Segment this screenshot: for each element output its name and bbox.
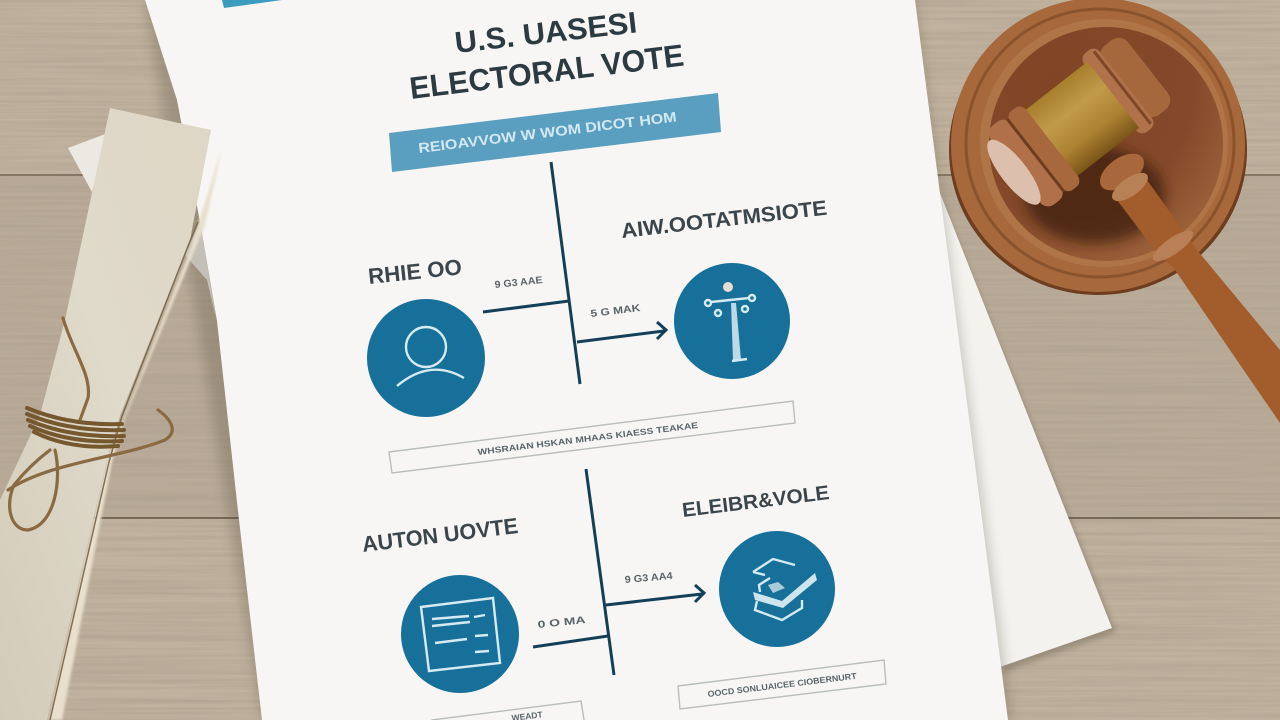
blue banner: [389, 93, 721, 172]
flow diagram: top: 9 G3 AAE: [494, 275, 543, 291]
paper scroll: [0, 108, 222, 720]
icon: document: [401, 575, 519, 693]
flow diagram: top: [367, 162, 828, 384]
flow diagram: bottom: 0 O MA: [537, 615, 586, 631]
icon: books: [719, 531, 835, 647]
flow diagram: bottom: [361, 469, 831, 675]
caption box: bottom left: [432, 701, 585, 720]
gavel sound block: [949, 0, 1247, 295]
back paper sheet: [938, 188, 1116, 672]
flow diagram: bottom: ELEIBR&VOLE: [681, 482, 831, 522]
curled under sheet: [68, 133, 216, 318]
gavel handle: [1093, 146, 1280, 423]
flow diagram: bottom: 9 G3 AA4: [624, 571, 674, 586]
flow diagram: top: AIW.OOTATMSIOTE: [620, 197, 828, 243]
blue banner: REIOAVVOW W WOM DICOT HOM: [417, 108, 677, 156]
flow diagram: top: RHIE OO: [367, 254, 463, 289]
caption box: bottom right: [678, 660, 886, 709]
gavel head: [973, 28, 1179, 220]
caption box: bottom right: OOCD SONLUAICEE CIOBERNURT: [707, 671, 858, 699]
title: U.S. UASESI: [453, 6, 639, 60]
twine: [8, 318, 172, 530]
icon: tower: [674, 263, 790, 379]
flow diagram: top: 5 G MAK: [590, 303, 642, 320]
flow diagram: bottom: AUTON UOVTE: [361, 513, 519, 557]
icon: person: [367, 299, 485, 417]
top teal strip: [222, 0, 282, 8]
title: [408, 6, 686, 106]
caption box: top: [389, 401, 795, 473]
title: ELECTORAL VOTE: [408, 38, 686, 106]
main document: [145, 0, 1012, 720]
caption box: top: WHSRAIAN HSKAN MHAAS KIAESS TEAKAE: [477, 420, 699, 457]
